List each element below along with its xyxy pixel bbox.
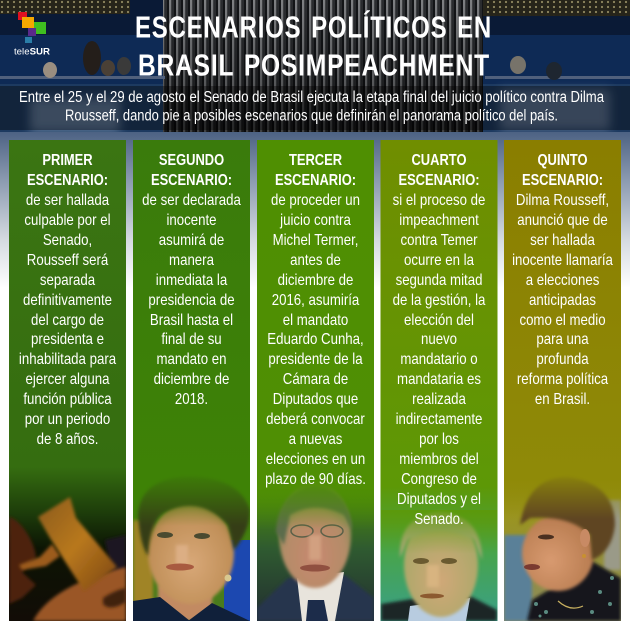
- image: gavel: [9, 497, 126, 621]
- body text: diciembre de: [278, 272, 353, 289]
- title: ESCENARIOS POLÍTICOS EN: [135, 10, 492, 44]
- body text: Diputados que: [273, 391, 358, 408]
- heading: [19, 152, 116, 448]
- body text: segunda mitad: [396, 272, 482, 289]
- logo: teleSUR: [14, 12, 50, 58]
- body text: separada: [40, 272, 95, 289]
- body text: inhabilitada para: [19, 351, 116, 368]
- heading: [142, 152, 241, 408]
- panel: quinto escenario: [504, 140, 621, 621]
- body text: 2018.: [175, 391, 208, 408]
- heading: ESCENARIO:: [275, 172, 356, 189]
- heading: QUINTO: [537, 152, 588, 169]
- body text: para una: [536, 331, 589, 348]
- heading: [512, 152, 613, 408]
- body text: de proceder un: [271, 192, 360, 209]
- intro text: [19, 89, 604, 124]
- logo: teleSUR: teleSUR: [14, 46, 50, 58]
- body text: final de su: [161, 331, 222, 348]
- heading: [393, 152, 485, 528]
- body text: mandataria es: [397, 371, 481, 388]
- body text: Dilma Rousseff,: [516, 192, 609, 209]
- body text: [19, 192, 116, 448]
- body text: de la gestión, la: [393, 292, 485, 309]
- body text: diciembre de: [154, 371, 229, 388]
- body text: presidenta e: [31, 331, 104, 348]
- body text: 2016, asumiría: [272, 292, 359, 309]
- body text: nuevo: [421, 331, 457, 348]
- body text: de ser declarada: [142, 192, 241, 209]
- title: BRASIL POSIMPEACHMENT: [138, 48, 490, 82]
- body text: indirectamente: [396, 411, 482, 428]
- heading: PRIMER: [42, 152, 93, 169]
- body text: [512, 192, 613, 408]
- body text: [142, 192, 241, 408]
- heading: [265, 152, 366, 488]
- body text: contra Temer: [400, 232, 478, 249]
- body text: de ser hallada: [26, 192, 109, 209]
- heading: CUARTO: [411, 152, 467, 169]
- body text: si el proceso de: [393, 192, 485, 209]
- body text: Diputados y el: [397, 491, 481, 508]
- panel: cuarto escenario: [380, 140, 498, 621]
- body text: Senado,: [43, 232, 92, 249]
- body text: Congreso de: [401, 471, 477, 488]
- body text: Michel Termer,: [273, 232, 358, 249]
- body text: presidencia de: [148, 292, 235, 309]
- body text: ocurre en la: [404, 252, 474, 269]
- body text: por los: [419, 431, 459, 448]
- body text: elecciones en un: [266, 451, 365, 468]
- body text: Rousseff será: [27, 252, 108, 269]
- panel: tercer escenario: [257, 140, 374, 621]
- body text: anticipadas: [529, 292, 596, 309]
- body text: Brasil hasta el: [150, 312, 233, 329]
- body text: [265, 192, 366, 488]
- body text: plazo de 90 días.: [265, 471, 366, 488]
- heading: ESCENARIO:: [151, 172, 232, 189]
- body text: inocente: [166, 212, 217, 229]
- body text: juicio contra: [279, 212, 351, 229]
- body text: deberá convocar: [266, 411, 365, 428]
- body text: a elecciones: [526, 272, 599, 289]
- body text: Cámara de: [283, 371, 348, 388]
- heading: ESCENARIO:: [398, 172, 480, 189]
- body text: asumirá de: [159, 232, 224, 249]
- background: Senate chamber photo: [0, 0, 630, 278]
- heading: SEGUNDO: [159, 152, 224, 169]
- body text: por un periodo: [25, 411, 110, 428]
- heading: TERCER: [289, 152, 343, 169]
- image: Michel Temer portrait: [381, 510, 498, 621]
- body text: manera: [169, 252, 214, 269]
- body text: profunda: [536, 351, 589, 368]
- panel: segundo escenario: [133, 140, 250, 621]
- body text: definitivamente: [23, 292, 112, 309]
- body text: reforma política: [517, 371, 608, 388]
- body text: anunció que de: [517, 212, 608, 229]
- image: Dilma Rousseff speaking: [504, 470, 621, 621]
- heading: ESCENARIO:: [27, 172, 108, 189]
- body text: realizada: [412, 391, 466, 408]
- image: Eduardo Cunha portrait: [257, 480, 374, 621]
- body text: inocente llamaría: [512, 252, 613, 269]
- body text: el mandato: [283, 312, 348, 329]
- body text: función pública: [23, 391, 112, 408]
- body text: [393, 192, 485, 528]
- body text: Senado.: [414, 511, 464, 528]
- body text: como el medio: [519, 312, 606, 329]
- body text: ser hallada: [530, 232, 595, 249]
- body text: culpable por el: [24, 212, 111, 229]
- body text: Eduardo Cunha,: [267, 331, 364, 348]
- image: Dilma Rousseff portrait: [133, 470, 250, 621]
- heading: ESCENARIO:: [522, 172, 603, 189]
- body text: impeachment: [399, 212, 479, 229]
- panel: primer escenario: [9, 140, 126, 621]
- title: [135, 10, 492, 82]
- body text: elección del: [404, 312, 474, 329]
- body text: de 8 años.: [37, 431, 98, 448]
- body text: ejercer alguna: [26, 371, 109, 388]
- body text: inmediata la: [156, 272, 227, 289]
- body text: presidente de la: [268, 351, 363, 368]
- body text: en Brasil.: [535, 391, 590, 408]
- body text: mandatario o: [400, 351, 478, 368]
- body text: del cargo de: [31, 312, 104, 329]
- body text: miembros del: [399, 451, 479, 468]
- body text: a nuevas: [289, 431, 342, 448]
- body text: mandato en: [157, 351, 226, 368]
- body text: antes de: [290, 252, 341, 269]
